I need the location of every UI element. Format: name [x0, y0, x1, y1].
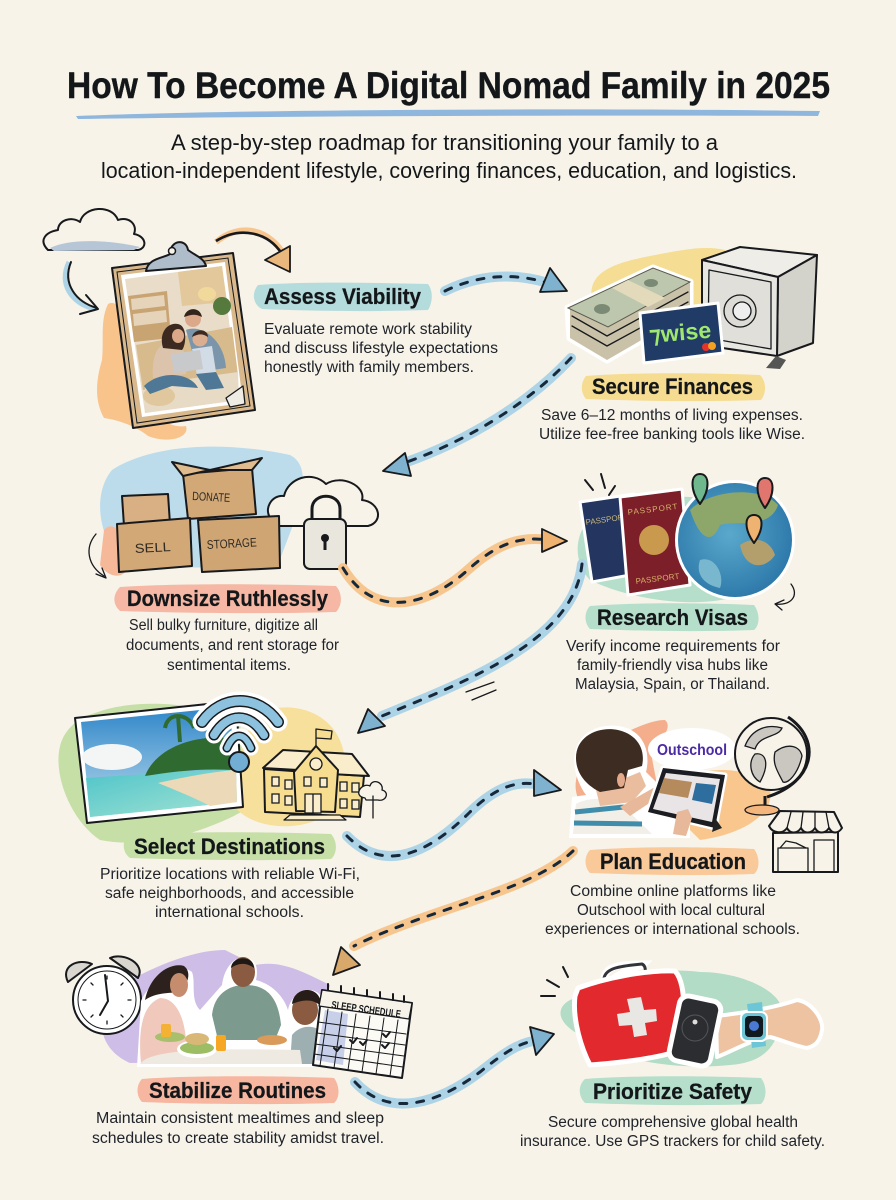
icon: market stall: [769, 811, 842, 872]
arrow: blue curved: [65, 262, 98, 314]
arrow: small squiggle: [775, 584, 794, 610]
body text: research visas: Malaysia, Spain, or Thailand.: [575, 676, 770, 693]
body text: plan education: Combine online platforms like: [570, 883, 776, 900]
blob: orange: [97, 303, 186, 440]
icon: first aid kit: [574, 964, 684, 1065]
arrow: education to routines: [333, 851, 573, 975]
heading: research visas: Research Visas: [597, 605, 748, 630]
icon: school: [263, 729, 369, 820]
step 4: research visas: [566, 474, 795, 693]
icon: globe on stand: [735, 717, 809, 815]
icon: red passport: [620, 489, 690, 595]
subtitle: A step-by-step roadmap for transitioning your family to a: [171, 130, 719, 155]
icon: wi-fi: [202, 701, 278, 772]
body text: secure finances: Save 6–12 months of living expenses.: [541, 407, 803, 424]
body text: select destinations: international schools.: [155, 904, 304, 921]
man: [186, 329, 226, 372]
arrow: small squiggle: [89, 534, 106, 578]
icon: boxes: DONATE: [192, 489, 231, 505]
woman: [153, 342, 186, 378]
heading: prioritize safety: Prioritize Safety: [593, 1079, 752, 1104]
illustration: boy with tablet: [569, 726, 690, 838]
rug and pillow: [145, 372, 239, 413]
heading: stabilize routines: Stabilize Routines: [149, 1078, 326, 1103]
arrow: downsize to visas: [343, 529, 567, 602]
icon: red passport: PASSPORT: [627, 502, 678, 517]
heading: downsize ruthlessly: Downsize Ruthlessly: [127, 586, 328, 611]
body text: secure finances: [539, 407, 805, 443]
body text: assess viability: honestly with family members.: [264, 359, 474, 376]
page curl: [226, 386, 245, 407]
photo: family at table: [137, 957, 326, 1067]
step 1: assess viability: [43, 209, 498, 440]
subtitle: location-independent lifestyle, covering finances, education, and logistics.: [101, 158, 797, 183]
arrow: routines to safety: [355, 1027, 554, 1104]
arrow: orange curved: [216, 230, 290, 272]
icon: child wrist with watch: [716, 1000, 822, 1057]
body text: research visas: family-friendly visa hubs like: [577, 657, 768, 674]
body text: stabilize routines: Maintain consistent mealtimes and sleep: [96, 1110, 384, 1127]
icon: tick marks: [585, 474, 615, 495]
lamp and plant: [198, 287, 216, 301]
photo: beach: [75, 701, 243, 823]
blobs: [100, 447, 303, 576]
icon: wise card: [640, 303, 723, 363]
blob: purple: [102, 950, 330, 1063]
icon: gps tracker: [668, 994, 722, 1068]
icon: sleep schedule calendar: [313, 984, 412, 1078]
body text: prioritize safety: Secure comprehensive global health: [548, 1114, 798, 1131]
arrow: visas to destinations: [358, 564, 582, 733]
icon: boxes: STORAGE: [206, 535, 257, 552]
icon: globe: [675, 480, 795, 600]
body text: assess viability: [264, 321, 498, 376]
illustration: clipboard with family photo: [112, 242, 255, 428]
icon: boxes: [117, 458, 280, 572]
photo: [121, 262, 243, 417]
body text: prioritize safety: insurance. Use GPS trackers for child safety.: [520, 1133, 825, 1150]
step 5: select destinations: [58, 701, 386, 921]
icon: red passport: PASSPORT: [635, 572, 680, 586]
body text: downsize ruthlessly: sentimental items.: [167, 657, 291, 674]
blob: green: [578, 497, 785, 602]
icon: map pins: [692, 474, 772, 543]
step 7: stabilize routines: [66, 950, 412, 1147]
body text: select destinations: Prioritize locations with reliable Wi-Fi,: [100, 866, 360, 883]
step 3: downsize ruthlessly: [89, 447, 378, 674]
body text: assess viability: Evaluate remote work stability: [264, 321, 472, 338]
sofa: [136, 327, 238, 390]
child: [192, 332, 208, 346]
icon: cloud: [43, 209, 144, 251]
icon: sleep schedule calendar: SLEEP SCHEDULE: [331, 999, 402, 1021]
bubble: outschool: [648, 728, 736, 770]
blobs: [576, 720, 770, 840]
body text: stabilize routines: schedules to create stability amidst travel.: [92, 1130, 384, 1147]
body text: select destinations: [100, 866, 360, 921]
icon: wise card: ⁊wise: [648, 317, 712, 348]
blob: green: [560, 971, 782, 1066]
heading: assess viability: Assess Viability: [264, 284, 421, 309]
laptop: [171, 350, 203, 373]
clip: [146, 242, 206, 271]
body text: research visas: Verify income requirements for: [566, 638, 780, 655]
shelf: [128, 291, 171, 342]
icon: tick marks: [541, 967, 568, 996]
subtitle: [101, 130, 797, 183]
body text: stabilize routines: [92, 1110, 384, 1147]
title: How To Become A Digital Nomad Family in 2025: [67, 65, 830, 106]
icon: safe: [702, 247, 817, 369]
body text: secure finances: Utilize fee-free banking tools like Wise.: [539, 426, 805, 443]
arrow: assess to finances: [445, 268, 567, 292]
heading: plan education: Plan Education: [600, 849, 746, 874]
bubble: outschool: Outschool: [657, 742, 727, 759]
icon: tablet: [648, 768, 725, 836]
step 2: secure finances: [539, 247, 817, 443]
body text: downsize ruthlessly: documents, and rent storage for: [126, 637, 339, 654]
arrow: destinations to education: [347, 770, 561, 856]
blobs: [58, 704, 345, 843]
body text: select destinations: safe neighborhoods, and accessible: [105, 885, 354, 902]
body text: assess viability: and discuss lifestyle expectations: [264, 340, 498, 357]
arrow: finances to downsize: [383, 358, 571, 476]
body text: plan education: [545, 883, 800, 938]
icon: alarm clock: [66, 956, 141, 1034]
icon: cloud with padlock: [268, 477, 378, 569]
step 8: prioritize safety: [520, 964, 825, 1150]
icon: navy passport: PASSPORT: [585, 512, 629, 527]
icon: boxes: SELL: [134, 539, 171, 556]
step 6: plan education: [545, 717, 842, 938]
icon: navy passport: [580, 494, 646, 582]
body text: research visas: [566, 638, 780, 693]
body text: prioritize safety: [520, 1114, 825, 1150]
heading: secure finances: Secure Finances: [592, 374, 753, 399]
body text: downsize ruthlessly: [126, 617, 339, 674]
heading: select destinations: Select Destinations: [134, 834, 325, 859]
body text: plan education: Outschool with local cultural: [577, 902, 765, 919]
body text: downsize ruthlessly: Sell bulky furniture, digitize all: [129, 617, 318, 634]
icon: tree: [359, 782, 386, 818]
body text: plan education: experiences or international schools.: [545, 921, 800, 938]
blob: yellow: [591, 248, 730, 337]
icon: money stack: [568, 268, 690, 360]
